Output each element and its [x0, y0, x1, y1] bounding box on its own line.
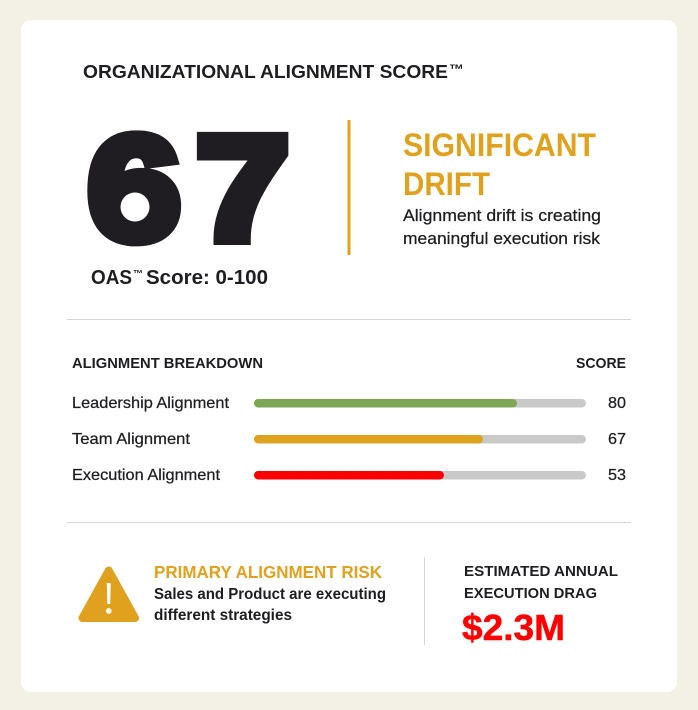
bar row: leadership alignment: Leadership Alignment	[72, 395, 230, 412]
bar row: leadership alignment	[72, 395, 626, 412]
primary risk heading: PRIMARY ALIGNMENT RISK	[154, 562, 382, 582]
status description: Alignment drift is creating	[403, 206, 601, 225]
bar row: team alignment: 67	[608, 431, 626, 448]
execution drag label	[464, 563, 618, 602]
primary risk description: different strategies	[154, 607, 292, 624]
big score number	[88, 107, 289, 271]
status description: meaningful execution risk	[403, 229, 601, 248]
title: ORGANIZATIONAL ALIGNMENT SCORE	[83, 62, 448, 82]
section heading: score: SCORE	[576, 355, 626, 372]
vertical gold divider	[348, 120, 350, 255]
status heading	[403, 127, 596, 202]
execution drag label: ESTIMATED ANNUAL	[464, 563, 618, 580]
status description	[403, 206, 601, 248]
execution drag label: EXECUTION DRAG	[464, 585, 597, 602]
title: ™	[449, 61, 464, 77]
primary risk description	[154, 586, 386, 624]
section heading: alignment breakdown: ALIGNMENT BREAKDOWN	[72, 355, 263, 372]
big score number: 6	[88, 107, 180, 271]
score range caption: ™	[133, 269, 143, 280]
status heading: SIGNIFICANT	[403, 127, 596, 163]
icon: warning triangle	[82, 570, 135, 618]
bar row: leadership alignment: 80	[608, 395, 626, 412]
bar row: team alignment: Team Alignment	[72, 431, 191, 448]
bar row: execution alignment: 53	[608, 467, 626, 484]
score range caption: OAS	[91, 267, 132, 289]
bar row: execution alignment: Execution Alignment	[72, 467, 221, 484]
status heading: DRIFT	[403, 166, 490, 202]
bar row: execution alignment	[72, 467, 626, 484]
big score number: 7	[196, 107, 289, 271]
bar row: team alignment	[72, 431, 626, 448]
primary risk description: Sales and Product are executing	[154, 586, 386, 603]
execution drag value: $2.3M	[462, 607, 565, 648]
score range caption	[91, 267, 268, 289]
score range caption: Score: 0-100	[146, 267, 268, 289]
